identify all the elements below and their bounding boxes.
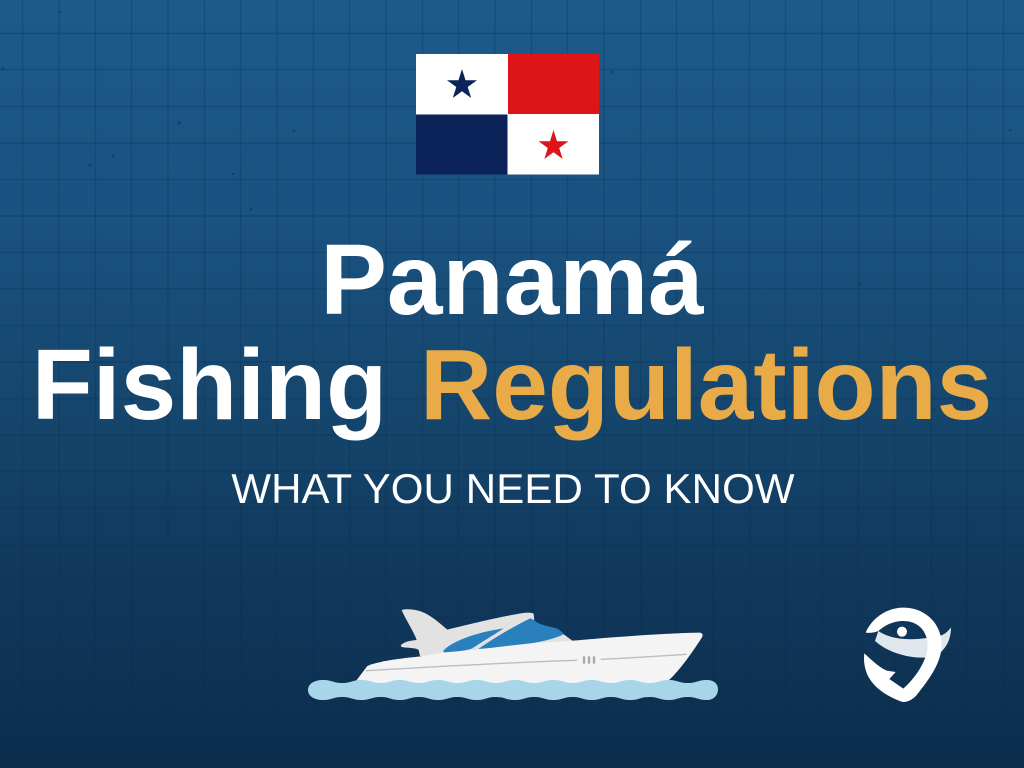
fin and cabin — [401, 609, 573, 657]
tail and band — [875, 627, 951, 658]
windows — [443, 628, 504, 652]
vents — [584, 656, 594, 664]
hull stripe — [366, 654, 687, 671]
body outline — [864, 608, 942, 702]
hull — [356, 633, 703, 687]
water — [308, 680, 718, 700]
subtitle: WHAT YOU NEED TO KNOW — [231, 465, 795, 512]
eye — [897, 627, 907, 637]
title: Fishing Regulations: Fishing Regulations — [32, 329, 992, 441]
title: Panamá: Panamá — [320, 224, 704, 336]
